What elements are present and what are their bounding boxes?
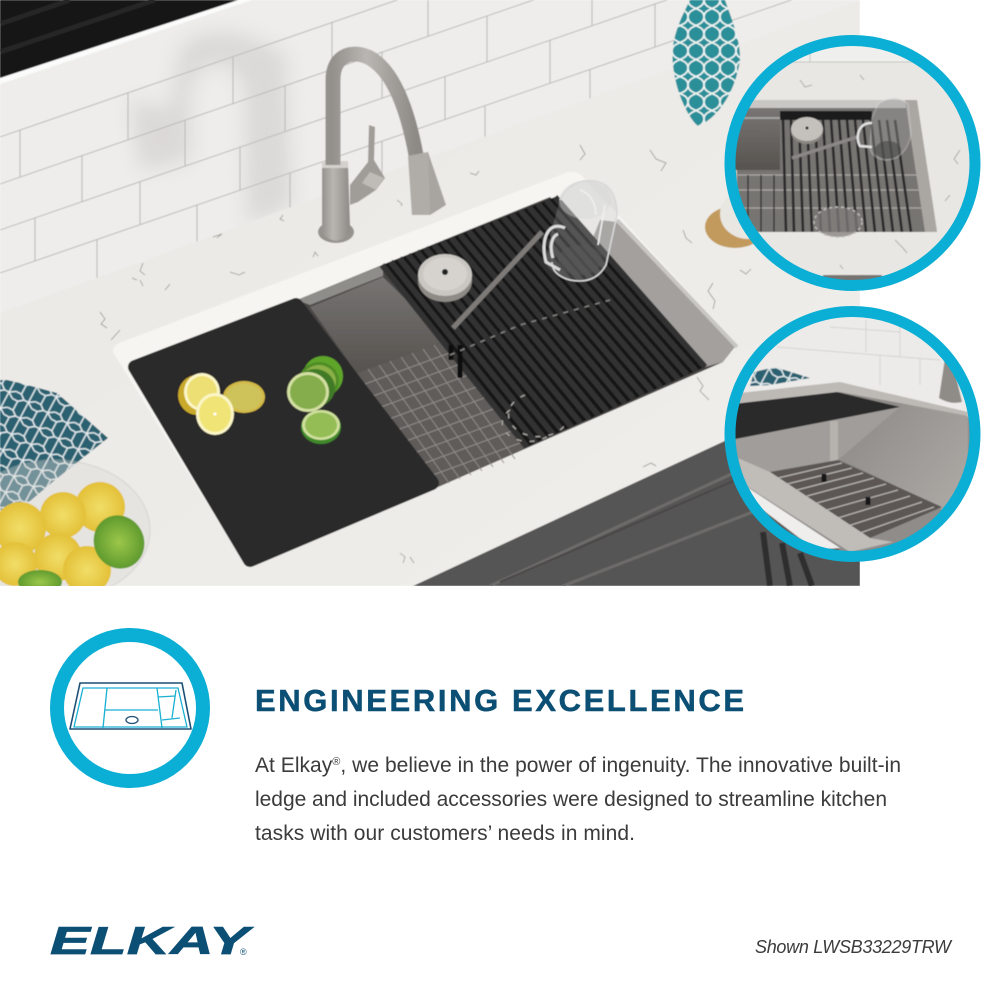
towel [0, 380, 108, 510]
sink rim [114, 172, 652, 490]
marble veins [100, 144, 752, 564]
heading: ENGINEERING EXCELLENCE [255, 683, 744, 718]
photo: kitchen sink scene [0, 0, 860, 600]
wire grid [364, 344, 520, 484]
logo: Elkay: ELKAY [50, 919, 254, 962]
lime slices [287, 356, 343, 444]
roll-up drying rack [382, 197, 705, 447]
icon: sink outline in circle [57, 635, 203, 781]
body text: tasks with our customers’ needs in mind. [255, 822, 635, 845]
cabinet [413, 440, 860, 586]
body text [255, 754, 901, 845]
inset ring 2 [730, 312, 975, 556]
inset circle: sink top view with drying rack [725, 35, 981, 291]
cutting board [135, 305, 432, 560]
body text: At Elkay [255, 754, 332, 777]
glass mug [544, 181, 617, 281]
strainer stick [453, 232, 542, 328]
countertop [0, 0, 860, 586]
faucet [318, 54, 446, 243]
model caption: Shown LWSB33229TRW [755, 937, 953, 957]
vase [672, 0, 741, 126]
inset ring 1 [730, 40, 975, 286]
sink basin [297, 197, 737, 487]
body text: ledge and included accessories were designed to streamline kitchen [255, 788, 887, 811]
body text: , we believe in the power of ingenuity. The innovative built-in [340, 754, 901, 777]
window frame [0, 0, 252, 84]
logo: Elkay: ® [240, 947, 247, 957]
cork coaster [704, 208, 754, 248]
fruit bowl [0, 458, 150, 586]
body text: ® [332, 756, 340, 768]
lemon slices [178, 373, 265, 435]
backsplash tiles [0, 0, 792, 278]
strainer disc [418, 254, 472, 302]
inset circle: ledge with cutting board [725, 306, 981, 565]
